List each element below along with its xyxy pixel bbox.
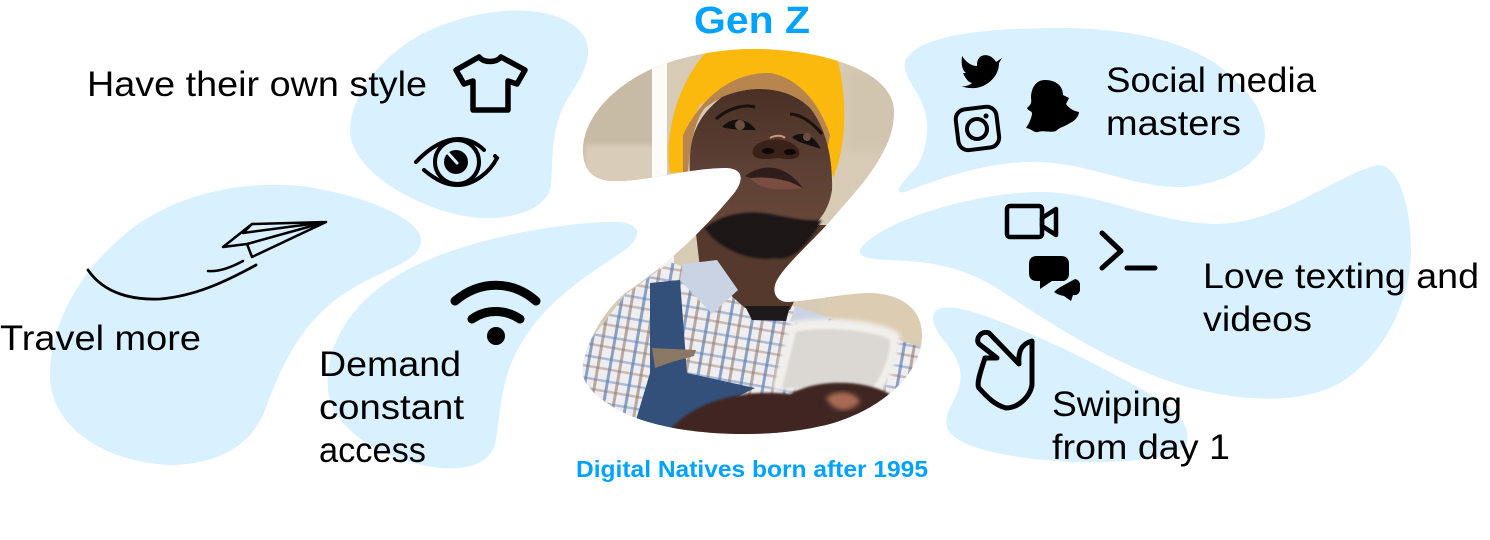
label: social: Social media (1106, 61, 1317, 100)
hand (668, 383, 890, 440)
shirt (582, 262, 921, 434)
label: access (319, 345, 464, 470)
label: travel: Travel more (0, 319, 201, 358)
icon: eye (416, 139, 497, 185)
photo: worker in Z-shaped mask (582, 49, 922, 434)
hard hat (668, 48, 844, 178)
phone (772, 319, 900, 392)
nose (753, 139, 799, 159)
blob: swiping (933, 307, 1188, 462)
neck (695, 225, 830, 310)
blob: style (350, 10, 588, 218)
icon: twitter (961, 55, 1002, 88)
label: social (1106, 61, 1317, 143)
blob: texting (860, 165, 1411, 399)
hat band (683, 73, 830, 172)
label: swiping: from day 1 (1052, 428, 1230, 467)
label: style: Have their own style (87, 65, 427, 104)
label: social: masters (1106, 104, 1241, 143)
label: swiping (1052, 385, 1230, 467)
collar (680, 260, 738, 314)
label: access: access (319, 431, 426, 470)
overall strap and bib (636, 280, 755, 430)
icon: video camera (1007, 206, 1056, 237)
lips (745, 168, 803, 188)
label: texting: videos (1203, 300, 1312, 339)
blob: travel (50, 185, 421, 465)
label: texting (1203, 257, 1479, 339)
beard (705, 213, 822, 259)
caption: Digital Natives born after 1995 (576, 456, 928, 482)
title: Gen Z (694, 0, 810, 42)
blob: social (899, 28, 1265, 192)
face (690, 89, 832, 227)
label: access: constant (319, 388, 464, 427)
icon: instagram (955, 106, 1000, 151)
icon: wifi (455, 285, 536, 345)
icon: snapchat ghost (1026, 80, 1079, 132)
blob: access (328, 222, 637, 468)
icon: paper plane with trail (88, 222, 326, 299)
eyes (722, 120, 821, 149)
label: access: Demand (319, 345, 461, 384)
label: texting: Love texting and (1203, 257, 1479, 296)
label: swiping: Swiping (1052, 385, 1182, 424)
icon: t-shirt (456, 57, 525, 110)
buckle (652, 348, 696, 368)
icon: terminal prompt (1102, 233, 1155, 268)
icon: swiping hand (978, 332, 1032, 408)
icon: chat bubbles (1029, 256, 1080, 301)
